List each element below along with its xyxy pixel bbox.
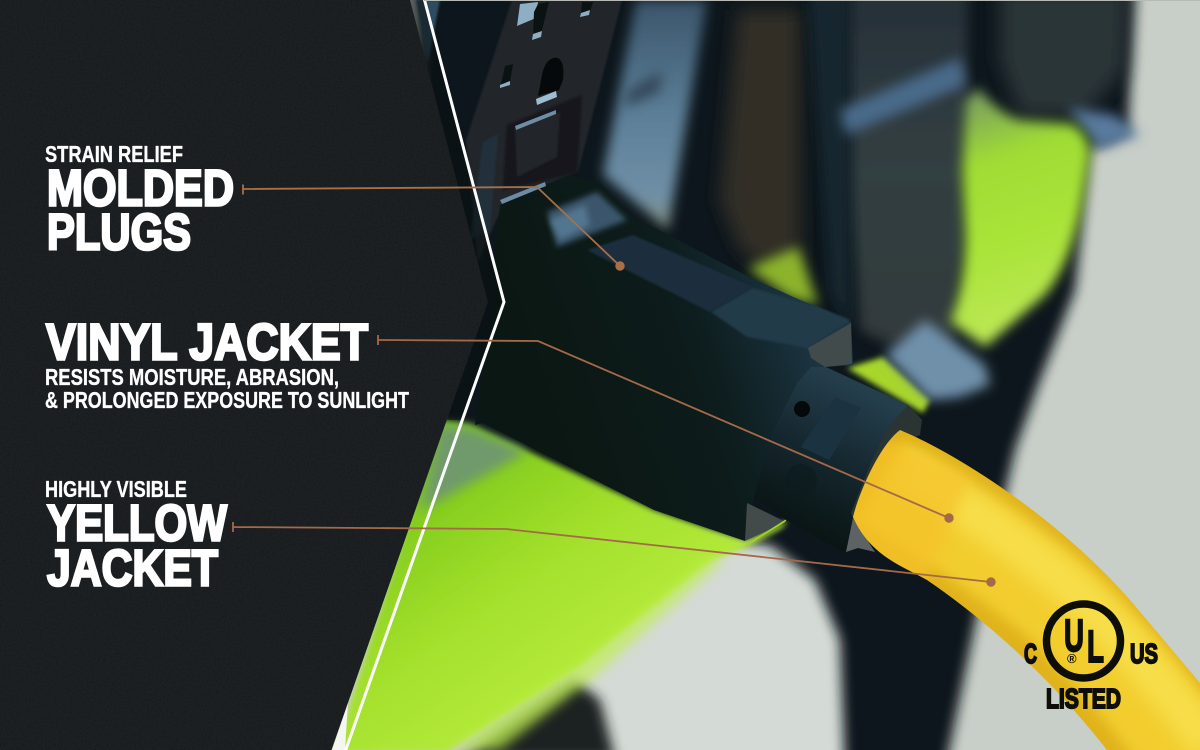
callout: vinyl jacket bbox=[45, 314, 409, 413]
callout: molded plugs bbox=[45, 141, 234, 261]
heading: vinyl jacket: VINYL JACKET bbox=[46, 314, 368, 371]
plug grey lower wedge bbox=[745, 503, 786, 541]
heading: molded: MOLDED bbox=[47, 160, 234, 217]
blurred outlet cover bbox=[848, 0, 968, 350]
blurred dark housing and post bbox=[420, 0, 1135, 750]
white chevron border bbox=[345, 0, 504, 750]
heading: jacket: JACKET bbox=[47, 540, 218, 597]
photo: power cord plugged into an outlet bbox=[332, 0, 1200, 750]
letter c: C bbox=[1024, 638, 1037, 669]
blurred olive patch behind plug bbox=[748, 247, 818, 305]
plate label bbox=[515, 112, 560, 177]
letters us: US bbox=[1130, 638, 1158, 669]
plug highlight ridge bbox=[547, 192, 627, 247]
molded plug body bbox=[475, 175, 853, 541]
lime strip under plug bbox=[745, 518, 788, 545]
shadowed green board corner bbox=[420, 425, 528, 512]
blurred lime handle bbox=[950, 88, 1090, 347]
UL listed certification mark bbox=[1024, 604, 1158, 714]
dark left panel bbox=[0, 0, 488, 750]
letter U: U bbox=[1064, 610, 1084, 661]
cord orange end bbox=[853, 439, 967, 582]
yellow cord bbox=[840, 420, 1200, 750]
blurred lime patch right of collar bbox=[847, 357, 930, 413]
collar bbox=[754, 367, 922, 552]
plug grey end face bbox=[808, 323, 852, 367]
collar rim bbox=[851, 405, 922, 540]
listed: LISTED bbox=[1046, 683, 1121, 714]
lighter lime bottom edge bbox=[450, 556, 724, 750]
plate label highlight bbox=[515, 110, 556, 130]
plate tiny print bbox=[470, 134, 498, 240]
UL ring bbox=[1046, 604, 1120, 678]
blurred blue band bbox=[840, 58, 966, 135]
plug shoulder bbox=[711, 288, 851, 348]
thin top rule bbox=[424, 0, 1200, 1]
cord base colour bbox=[840, 420, 1200, 750]
collar screw bbox=[785, 464, 817, 496]
blurred upper right block bbox=[1000, 0, 1128, 115]
blurred blue tip bbox=[1068, 108, 1140, 150]
plate socket slots bbox=[500, 2, 593, 105]
heading: yellow: YELLOW bbox=[47, 495, 228, 552]
blurred blue tab bbox=[885, 320, 990, 400]
description line one: RESISTS MOISTURE, ABRASION, bbox=[45, 364, 339, 390]
collar grey lip bbox=[846, 518, 875, 552]
blue streak at top left of chevron bbox=[416, 0, 440, 62]
collar tab bbox=[801, 397, 861, 460]
panel grain texture bbox=[372, 568, 395, 635]
blurred dark-blue cover edge bbox=[808, 0, 850, 330]
description line two: & PROLONGED EXPOSURE TO SUNLIGHT bbox=[45, 387, 409, 413]
blurred brown centre bbox=[720, 10, 800, 290]
label: strain relief: STRAIN RELIEF bbox=[45, 141, 183, 167]
dark translucent band beside white border bbox=[405, 0, 504, 420]
leader line: yellow jacket bbox=[233, 522, 995, 586]
lime board bbox=[335, 420, 788, 750]
blurred grey-blue outlet cover bbox=[603, 0, 707, 230]
plug grip recess bbox=[587, 235, 753, 312]
plug ridge bright spot bbox=[550, 205, 590, 240]
plate dark recess bbox=[503, 95, 582, 190]
heading: plugs: PLUGS bbox=[47, 204, 191, 261]
collar hole bbox=[794, 401, 810, 417]
cord bright tone bbox=[900, 470, 1200, 745]
light grey floor on the left bbox=[560, 540, 850, 750]
outlet plate bbox=[466, 0, 622, 262]
callout: yellow jacket bbox=[45, 476, 228, 597]
blurred dark shape at bottom bbox=[460, 680, 615, 750]
cord mid tone bbox=[880, 482, 1200, 750]
letter L: L bbox=[1087, 621, 1104, 672]
registered mark: ® bbox=[1067, 651, 1077, 666]
leader line: vinyl jacket bbox=[378, 335, 953, 522]
label: highly visible: HIGHLY VISIBLE bbox=[45, 476, 187, 502]
white wedge at panel bottom bbox=[332, 703, 348, 750]
leader line: molded plugs bbox=[243, 184, 624, 270]
blurred darker band on cover bbox=[624, 70, 662, 108]
plug top edge highlight bbox=[500, 182, 546, 204]
